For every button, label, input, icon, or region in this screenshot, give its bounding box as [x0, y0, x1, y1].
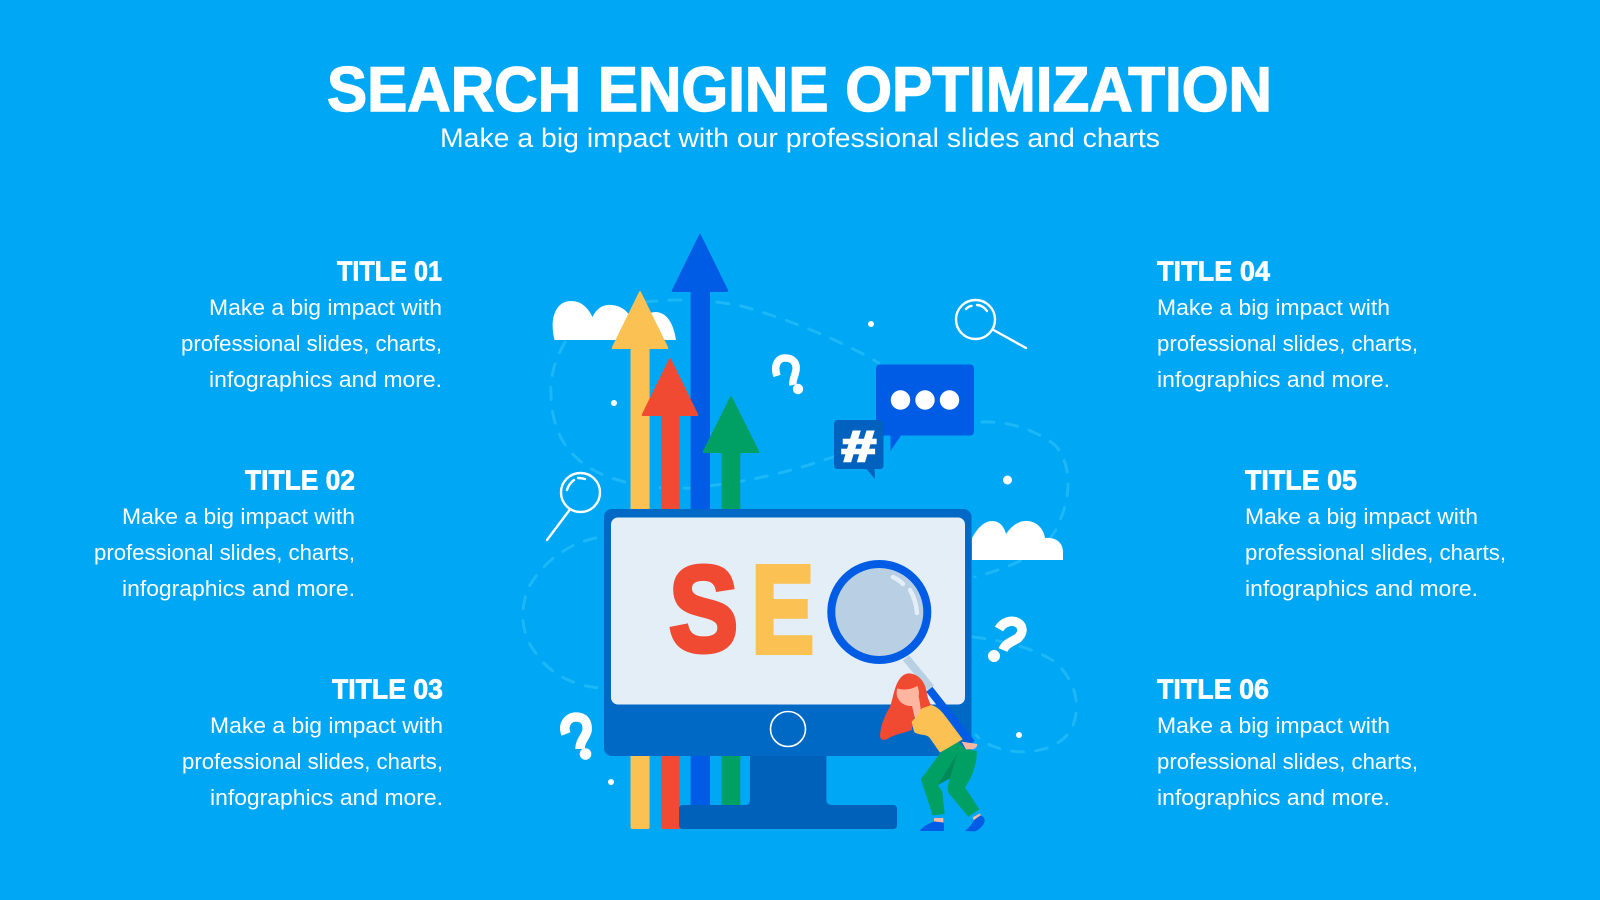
shirt — [912, 705, 963, 753]
subtitle: Make a big impact with our professional slides and charts — [440, 123, 1160, 153]
woman holding magnifier — [880, 673, 985, 831]
panel: title 06 — [1157, 674, 1418, 810]
hair — [880, 673, 931, 740]
text block: title 03: Make a big impact with — [210, 713, 443, 738]
icon: question mark right — [988, 621, 1022, 662]
arrow: yellow — [612, 291, 668, 829]
text block: title 04: infographics and more. — [1157, 367, 1390, 392]
text block: title 03: professional slides, charts, — [182, 749, 443, 774]
text block: title 02: infographics and more. — [122, 576, 355, 601]
icon: cloud left — [553, 301, 676, 340]
text block: title 04: professional slides, charts, — [1157, 331, 1418, 356]
icon: cloud right — [972, 521, 1063, 560]
ankles — [934, 813, 982, 823]
monitor — [604, 509, 972, 829]
text block: title 01 — [181, 295, 442, 392]
icon: magnifier top right — [956, 300, 1026, 348]
text block: title 04: Make a big impact with — [1157, 295, 1390, 320]
text block: title 02: professional slides, charts, — [94, 540, 355, 565]
panel: title 01 — [181, 256, 442, 392]
text block: title 05: professional slides, charts, — [1245, 540, 1506, 565]
arrow: green — [703, 396, 759, 829]
text block: title 02 — [94, 504, 355, 601]
hand — [962, 742, 977, 749]
heading: title 02: TITLE 02 — [245, 464, 355, 496]
title: SEARCH ENGINE OPTIMIZATION — [327, 55, 1272, 125]
arrow: blue — [672, 234, 728, 829]
magnifier handle — [929, 689, 972, 743]
monitor button — [770, 712, 806, 746]
icon: question mark bottom left — [565, 717, 591, 760]
text block: title 06: professional slides, charts, — [1157, 749, 1418, 774]
heading: title 05: TITLE 05 — [1245, 464, 1357, 496]
letter S: S — [669, 541, 738, 677]
text block: title 01: professional slides, charts, — [181, 331, 442, 356]
text block: title 03 — [182, 713, 443, 810]
text block: title 01: Make a big impact with — [209, 295, 442, 320]
panel: title 02 — [94, 464, 355, 601]
icon: speech bubble — [876, 364, 974, 451]
heading: title 04: TITLE 04 — [1157, 256, 1270, 286]
text block: title 03: infographics and more. — [210, 785, 443, 810]
icon: magnifier left — [547, 473, 600, 540]
magnifying glass — [831, 564, 931, 688]
text block: title 06: Make a big impact with — [1157, 713, 1390, 738]
central SEO illustration — [523, 234, 1077, 831]
text block: title 06: infographics and more. — [1157, 785, 1390, 810]
face — [897, 686, 922, 718]
heading: title 06: TITLE 06 — [1157, 674, 1269, 704]
monitor body — [604, 509, 972, 756]
text block: title 02: Make a big impact with — [122, 504, 355, 529]
panel: title 03 — [182, 674, 443, 810]
icon: hashtag bubble — [834, 420, 884, 479]
arrow: red — [642, 358, 698, 829]
trousers — [921, 741, 979, 817]
trouser fold — [938, 753, 957, 785]
panel: title 05 — [1245, 464, 1506, 601]
icon: hashtag bubble: # — [841, 423, 875, 471]
monitor screen — [611, 518, 965, 704]
heading: title 01: TITLE 01 — [337, 256, 442, 286]
text block: title 05: infographics and more. — [1245, 576, 1478, 601]
text block: title 04 — [1157, 295, 1418, 392]
panel: title 04 — [1157, 256, 1418, 392]
letter E: E — [752, 541, 814, 679]
text block: title 05: Make a big impact with — [1245, 504, 1478, 529]
text block: title 06 — [1157, 713, 1418, 810]
heading: title 03: TITLE 03 — [332, 674, 443, 704]
monitor stand — [679, 750, 897, 829]
shoes — [920, 816, 985, 831]
small dots — [608, 321, 1022, 785]
text block: title 01: infographics and more. — [209, 367, 442, 392]
text block: title 05 — [1245, 504, 1506, 601]
icon: question mark top — [776, 358, 803, 394]
